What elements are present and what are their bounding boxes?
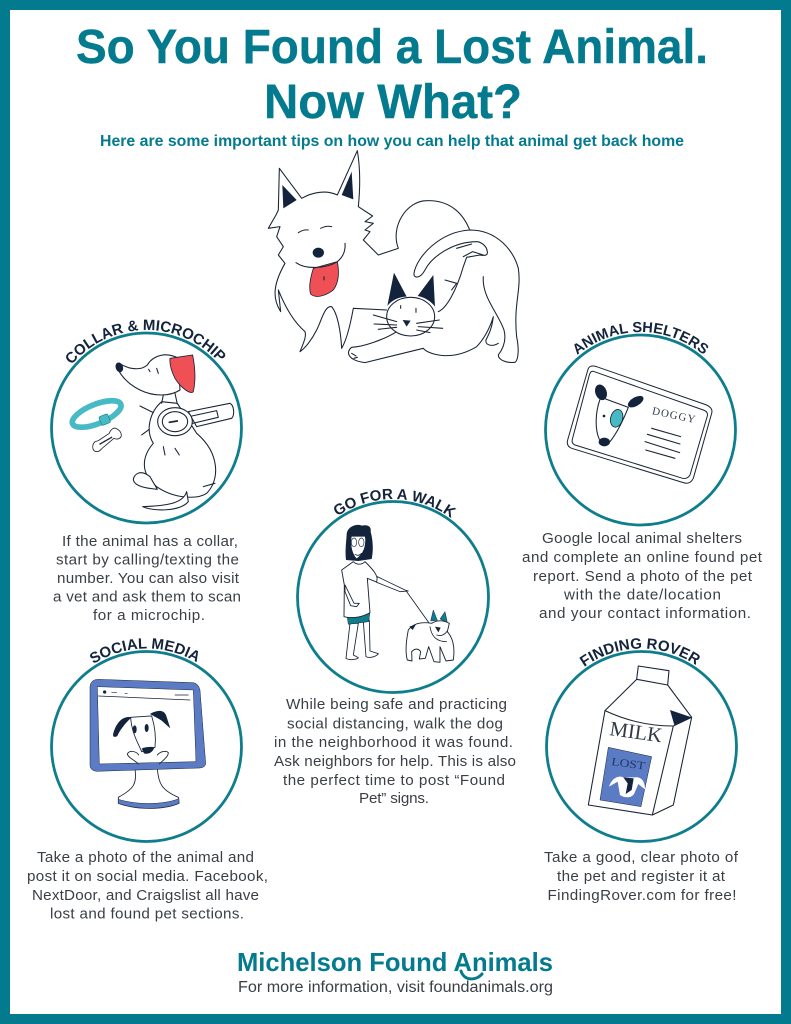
panel: finding rover [544,638,739,904]
monitor frame [90,679,206,771]
title [76,21,708,129]
description: If the animal has a collar, [62,533,238,550]
dog [406,621,454,662]
curved heading: COLLAR & MICROCHIP [66,320,226,363]
carton label: MILK [608,718,664,747]
dog nose [313,248,324,258]
panel: go for a walk [274,488,516,807]
circle [298,502,488,692]
cat face [373,306,443,333]
curved heading: GO FOR A WALK [334,488,456,518]
description [522,530,763,622]
description: NextDoor, and Craigslist all have [32,887,259,904]
shirt [342,562,377,618]
description: While being safe and practicing [286,696,507,713]
dog head [119,355,180,395]
card [567,366,712,483]
description [53,533,241,624]
skirt [347,612,370,624]
lost poster [600,747,652,807]
logo swoosh [461,971,482,979]
cat fill [346,230,519,363]
description: a vet and ask them to scan [53,588,241,606]
subtitle: Here are some important tips on how you can help that animal get back home [100,133,684,150]
description: post it on social media. Facebook, [27,868,268,885]
panel: social media [27,638,268,922]
footer link text: For more information, visit foundanimals.org [238,979,553,996]
circle [546,335,736,525]
curved heading: SOCIAL MEDIA [90,638,198,663]
dog back paw and tail [133,473,188,510]
description: Take a good, clear photo of [544,849,739,866]
cat head [387,297,435,336]
red ear [170,355,195,392]
dog face [596,398,628,442]
panel: animal shelters [522,322,763,622]
title: Now What? [264,76,522,129]
dog fill [268,151,470,352]
cat ears [387,273,435,307]
description [274,696,516,807]
circle [546,652,736,842]
scanner [188,403,234,427]
illustration: milk carton [588,666,692,815]
description: the pet and register it at [557,868,726,885]
description: Ask neighbors for help. This is also [274,753,516,770]
dog face [296,226,345,280]
description: report. Send a photo of the pet [533,568,753,585]
arms [345,577,408,607]
description: Pet” signs. [359,790,429,807]
teal collar [69,395,124,433]
panel: collar and microchip [50,320,243,624]
description: Google local animal shelters [542,530,742,547]
dog face [131,716,155,752]
description [27,849,268,922]
illustration: monitor with dog [90,679,206,808]
dog body [144,402,216,497]
bone tag [93,428,121,452]
description: start by calling/texting the [56,552,239,568]
description: with the date/location [563,586,721,604]
circle [52,333,242,523]
description: the perfect time to post “Found [283,772,505,789]
title: So You Found a Lost Animal. [76,21,708,74]
browser bar [98,696,190,700]
curved heading: FINDING ROVER [579,638,700,666]
curved heading: ANIMAL SHELTERS [574,322,708,355]
dog ears [282,172,353,208]
description: and complete an online found pet [522,549,763,566]
illustration: milk carton: LOST [611,756,646,773]
illustration: ID card [567,366,712,483]
footer logo: Michelson Found Animals [237,947,553,977]
stand [118,768,179,808]
legs [346,620,378,660]
leash [407,592,429,623]
cat outline [349,230,519,363]
screen [97,687,196,764]
face [351,537,365,558]
description: FindingRover.com for free! [548,887,736,904]
card name: DOGGY [651,405,697,426]
description: in the neighborhood it was found. [274,734,513,751]
hair [346,525,373,561]
small dog [609,777,645,797]
dog tongue [310,262,339,296]
illustration: dog and cat [268,151,519,363]
description: number. You can also visit [57,570,240,587]
description: and your contact information. [539,605,751,622]
carton [588,666,692,815]
dog outline [268,151,470,352]
description: lost and found pet sections. [50,906,244,922]
paws [127,751,168,764]
description [544,849,739,904]
description: social distancing, walk the dog [287,716,503,732]
fold [670,710,692,725]
illustration: dog, collar and scanner [69,355,234,510]
card lines [645,428,681,458]
description: for a microchip. [93,607,205,624]
illustration: woman walking dog [342,525,454,662]
circle [52,652,242,842]
description: Take a photo of the animal and [37,849,254,866]
